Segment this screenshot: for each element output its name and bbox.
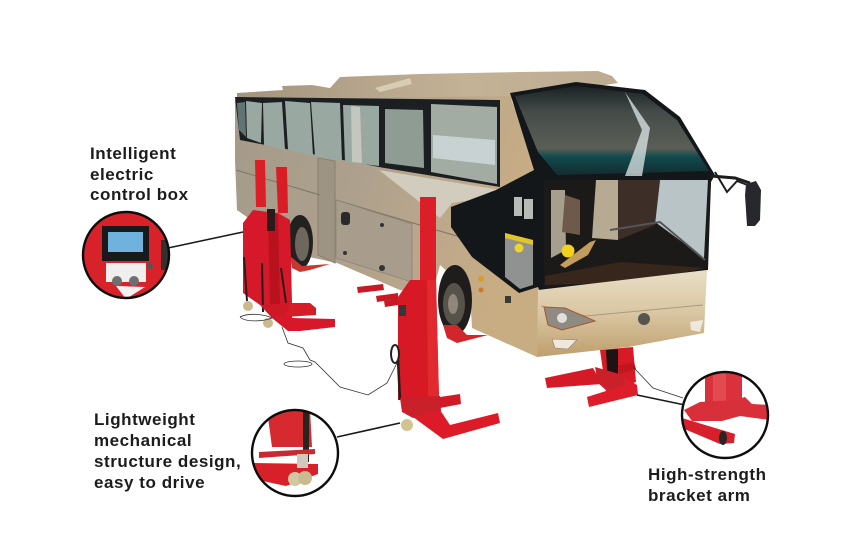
- third lift right foot: [587, 377, 638, 407]
- label: bracket arm: bracket arm: [648, 486, 750, 505]
- nearside lift under bus: [545, 347, 638, 407]
- label: control box: electric: [90, 165, 154, 184]
- label: mechanical structure: [94, 410, 241, 492]
- touch screen: [102, 226, 149, 261]
- front lift caster: [401, 419, 413, 431]
- label: control box: [90, 144, 189, 204]
- headlight: [544, 307, 595, 330]
- label: bracket arm: High-strength: [648, 465, 767, 484]
- infographic canvas: [82, 71, 770, 501]
- rear lift casters: [243, 301, 253, 311]
- front badge: [638, 313, 650, 325]
- third lift column: [600, 347, 636, 392]
- label: mechanical structure: Lightweight: [94, 410, 195, 429]
- bus body side: [235, 96, 540, 357]
- third lift base: [595, 367, 630, 391]
- front lift arms: [357, 284, 398, 307]
- rear lift feet: [285, 303, 316, 317]
- switch panel: [106, 263, 146, 282]
- upper windshield: [515, 86, 709, 175]
- column close-up: [705, 373, 742, 402]
- front lift saddle: [443, 325, 488, 343]
- front lift base: [400, 396, 441, 418]
- black front surround: [451, 82, 715, 293]
- label: control box: Intelligent: [90, 144, 176, 163]
- rear wheel: [287, 215, 313, 269]
- rear lifts: [243, 160, 335, 331]
- yellow sticker: [562, 244, 574, 258]
- callout circle: casters: [252, 410, 338, 496]
- column close-up: [267, 410, 312, 447]
- front bumper: [537, 270, 707, 357]
- mirror arm and mirror: [711, 176, 750, 183]
- label: mechanical structure: mechanical: [94, 431, 192, 450]
- front lift feet: [440, 394, 461, 408]
- leader lines: [168, 232, 685, 437]
- lower windscreen: [544, 180, 711, 287]
- caster close-up: [719, 431, 727, 445]
- bus: [235, 71, 761, 357]
- front lift column: [420, 197, 436, 285]
- front lift body: [398, 280, 439, 400]
- base close-up: [252, 463, 318, 486]
- front wheel: [438, 265, 472, 335]
- caster close-up: [288, 472, 300, 486]
- label: control box: control box: [90, 185, 189, 204]
- fog lamp: [552, 339, 577, 349]
- side markers: [478, 276, 484, 282]
- label: mechanical structure: structure design,: [94, 452, 241, 471]
- arm close-up: [684, 397, 770, 421]
- rear lift base: [260, 303, 292, 331]
- rear lift body: [243, 210, 292, 307]
- rear lift saddle: [290, 256, 330, 272]
- front lift: [357, 197, 500, 439]
- bus roof: [237, 71, 618, 100]
- label: bracket arm: [648, 465, 767, 505]
- bus side windows: [235, 97, 500, 187]
- callout circle: control box: [83, 212, 171, 299]
- control cables: [240, 314, 683, 398]
- label: mechanical structure: easy to drive: [94, 473, 205, 492]
- callout circle: bracket arm: [682, 372, 770, 458]
- third lift left foot: [545, 368, 602, 388]
- rear lift columns: [255, 160, 266, 207]
- bus side luggage doors: [336, 200, 412, 282]
